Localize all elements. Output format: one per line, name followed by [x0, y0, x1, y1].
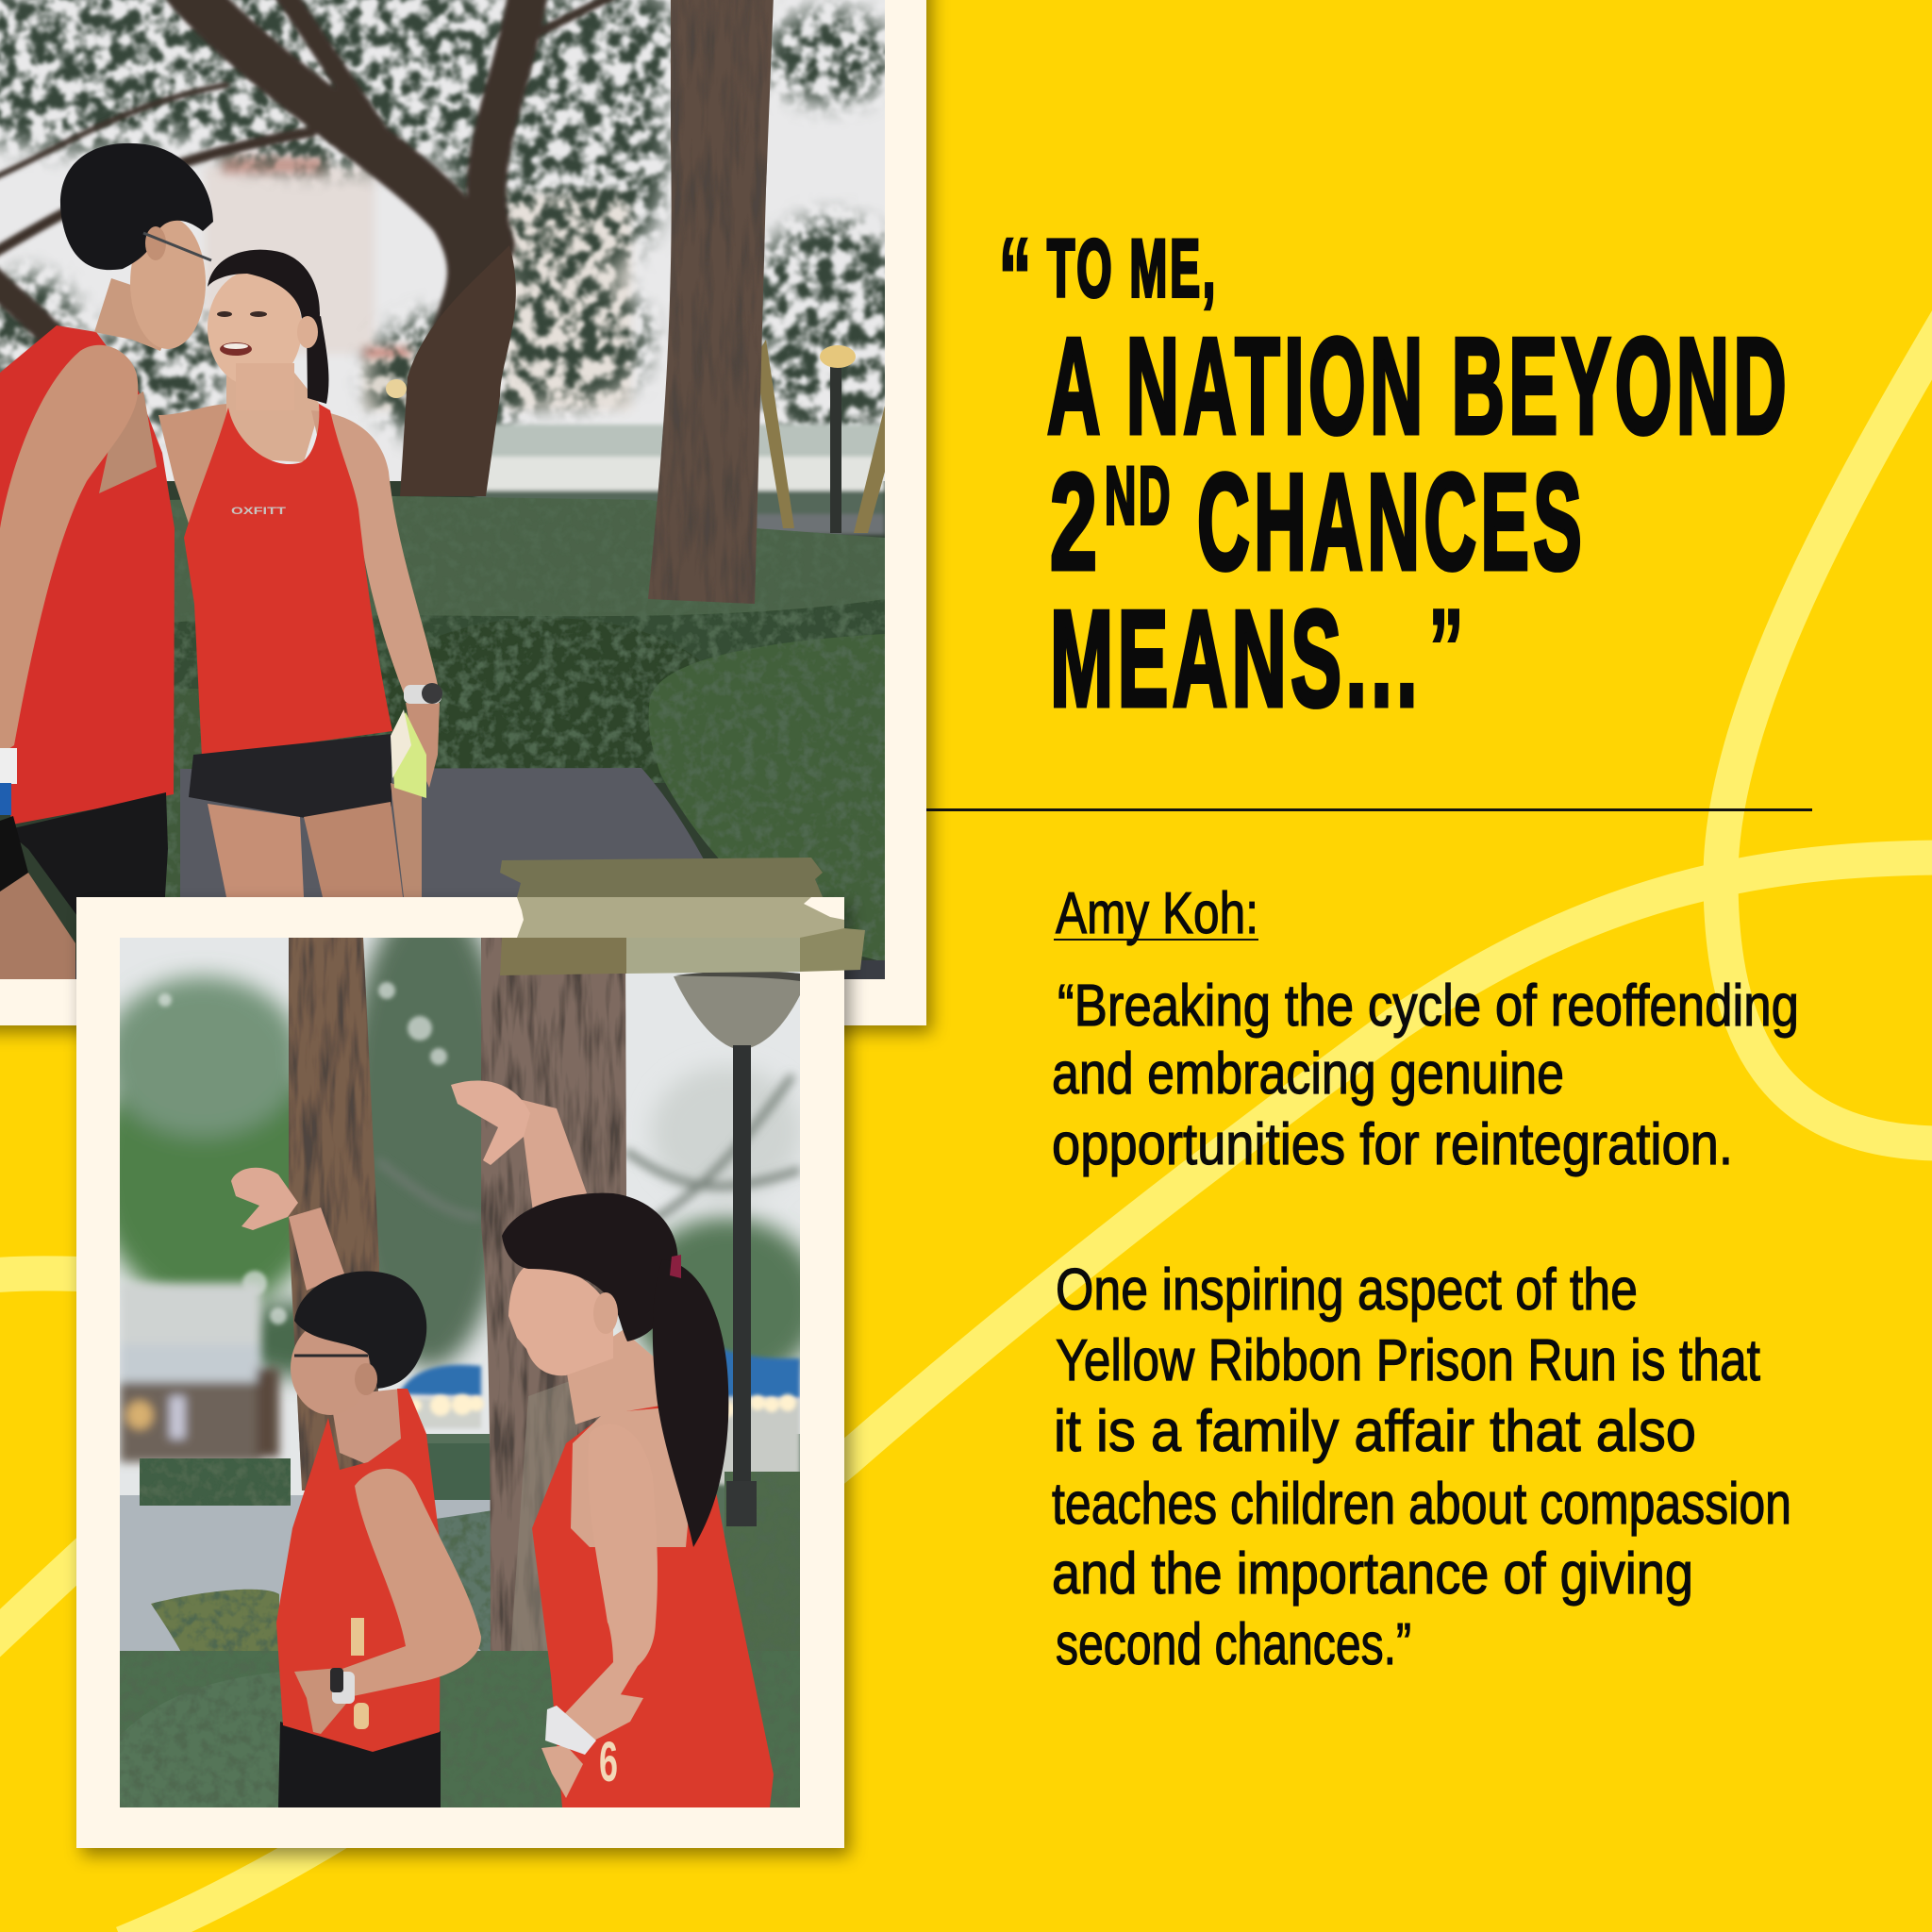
right round bush	[649, 634, 885, 962]
figure: woman smiling in red tank	[158, 250, 442, 897]
photo: couple stretching with raised arms	[120, 938, 800, 1807]
background buildings	[205, 156, 632, 410]
quote text: first paragraph: and embracing genuine	[1052, 1041, 1564, 1107]
bridge	[475, 425, 885, 535]
divider rule	[926, 808, 1812, 811]
umbrellas and string lights	[398, 1347, 800, 1485]
figure: woman stretching: 6	[599, 1730, 618, 1793]
washi tape	[500, 858, 865, 975]
tree trunk: large	[648, 0, 774, 604]
hedge and pavement	[120, 1495, 491, 1651]
heading: quote title	[998, 214, 1790, 735]
photo: couple talking under trees	[0, 0, 920, 979]
quote text: second paragraph: second chances.”	[1056, 1612, 1411, 1677]
right tree and lamp	[386, 340, 885, 533]
quote text: first paragraph: opportunities for reintegration.	[1052, 1112, 1733, 1177]
quote text: second paragraph	[1052, 1257, 1791, 1677]
lamp post	[674, 971, 800, 1526]
background pale area and buildings	[120, 1283, 279, 1462]
photo frame: top	[0, 0, 926, 1025]
heading: quote title: ND	[1105, 451, 1173, 541]
hedges	[165, 496, 885, 901]
bokeh highlights	[158, 982, 447, 1324]
quote text: second paragraph: and the importance of giving	[1052, 1541, 1693, 1607]
heading: quote title: ”	[1428, 586, 1464, 712]
figure: woman smiling in red tank: OXFITT	[231, 506, 286, 517]
tree trunk: middle	[400, 245, 516, 496]
heading: quote title: TO ME,	[1047, 224, 1218, 314]
blurred branches	[377, 1075, 800, 1226]
pavement	[180, 768, 726, 901]
figure: woman stretching	[451, 1080, 774, 1807]
canopy foliage	[0, 0, 920, 443]
tree branches and trunk	[0, 0, 619, 341]
photo frame: bottom	[76, 897, 844, 1848]
heading: quote title: “	[998, 214, 1032, 341]
quote text: second paragraph: it is a family affair that also	[1054, 1399, 1696, 1464]
quote text: first paragraph	[1052, 974, 1799, 1177]
quote text: second paragraph: Yellow Ribbon Prison Run is that	[1056, 1328, 1760, 1393]
quote text: first paragraph: “Breaking the cycle of reoffending	[1058, 974, 1799, 1039]
quote text: second paragraph: One inspiring aspect of the	[1056, 1257, 1638, 1323]
background trunks	[289, 938, 379, 1491]
heading: quote title: MEANS...	[1050, 582, 1422, 735]
heading: quote title: 2	[1050, 445, 1097, 598]
speaker name: Amy Koh:	[1056, 881, 1258, 946]
heading: quote title: CHANCES	[1197, 445, 1586, 598]
figure: man stretching	[231, 1168, 481, 1807]
right bushes	[724, 1472, 800, 1651]
figure: man with glasses in red tank	[0, 143, 213, 979]
background foliage	[120, 938, 800, 1400]
bottom hedge	[120, 1651, 800, 1811]
